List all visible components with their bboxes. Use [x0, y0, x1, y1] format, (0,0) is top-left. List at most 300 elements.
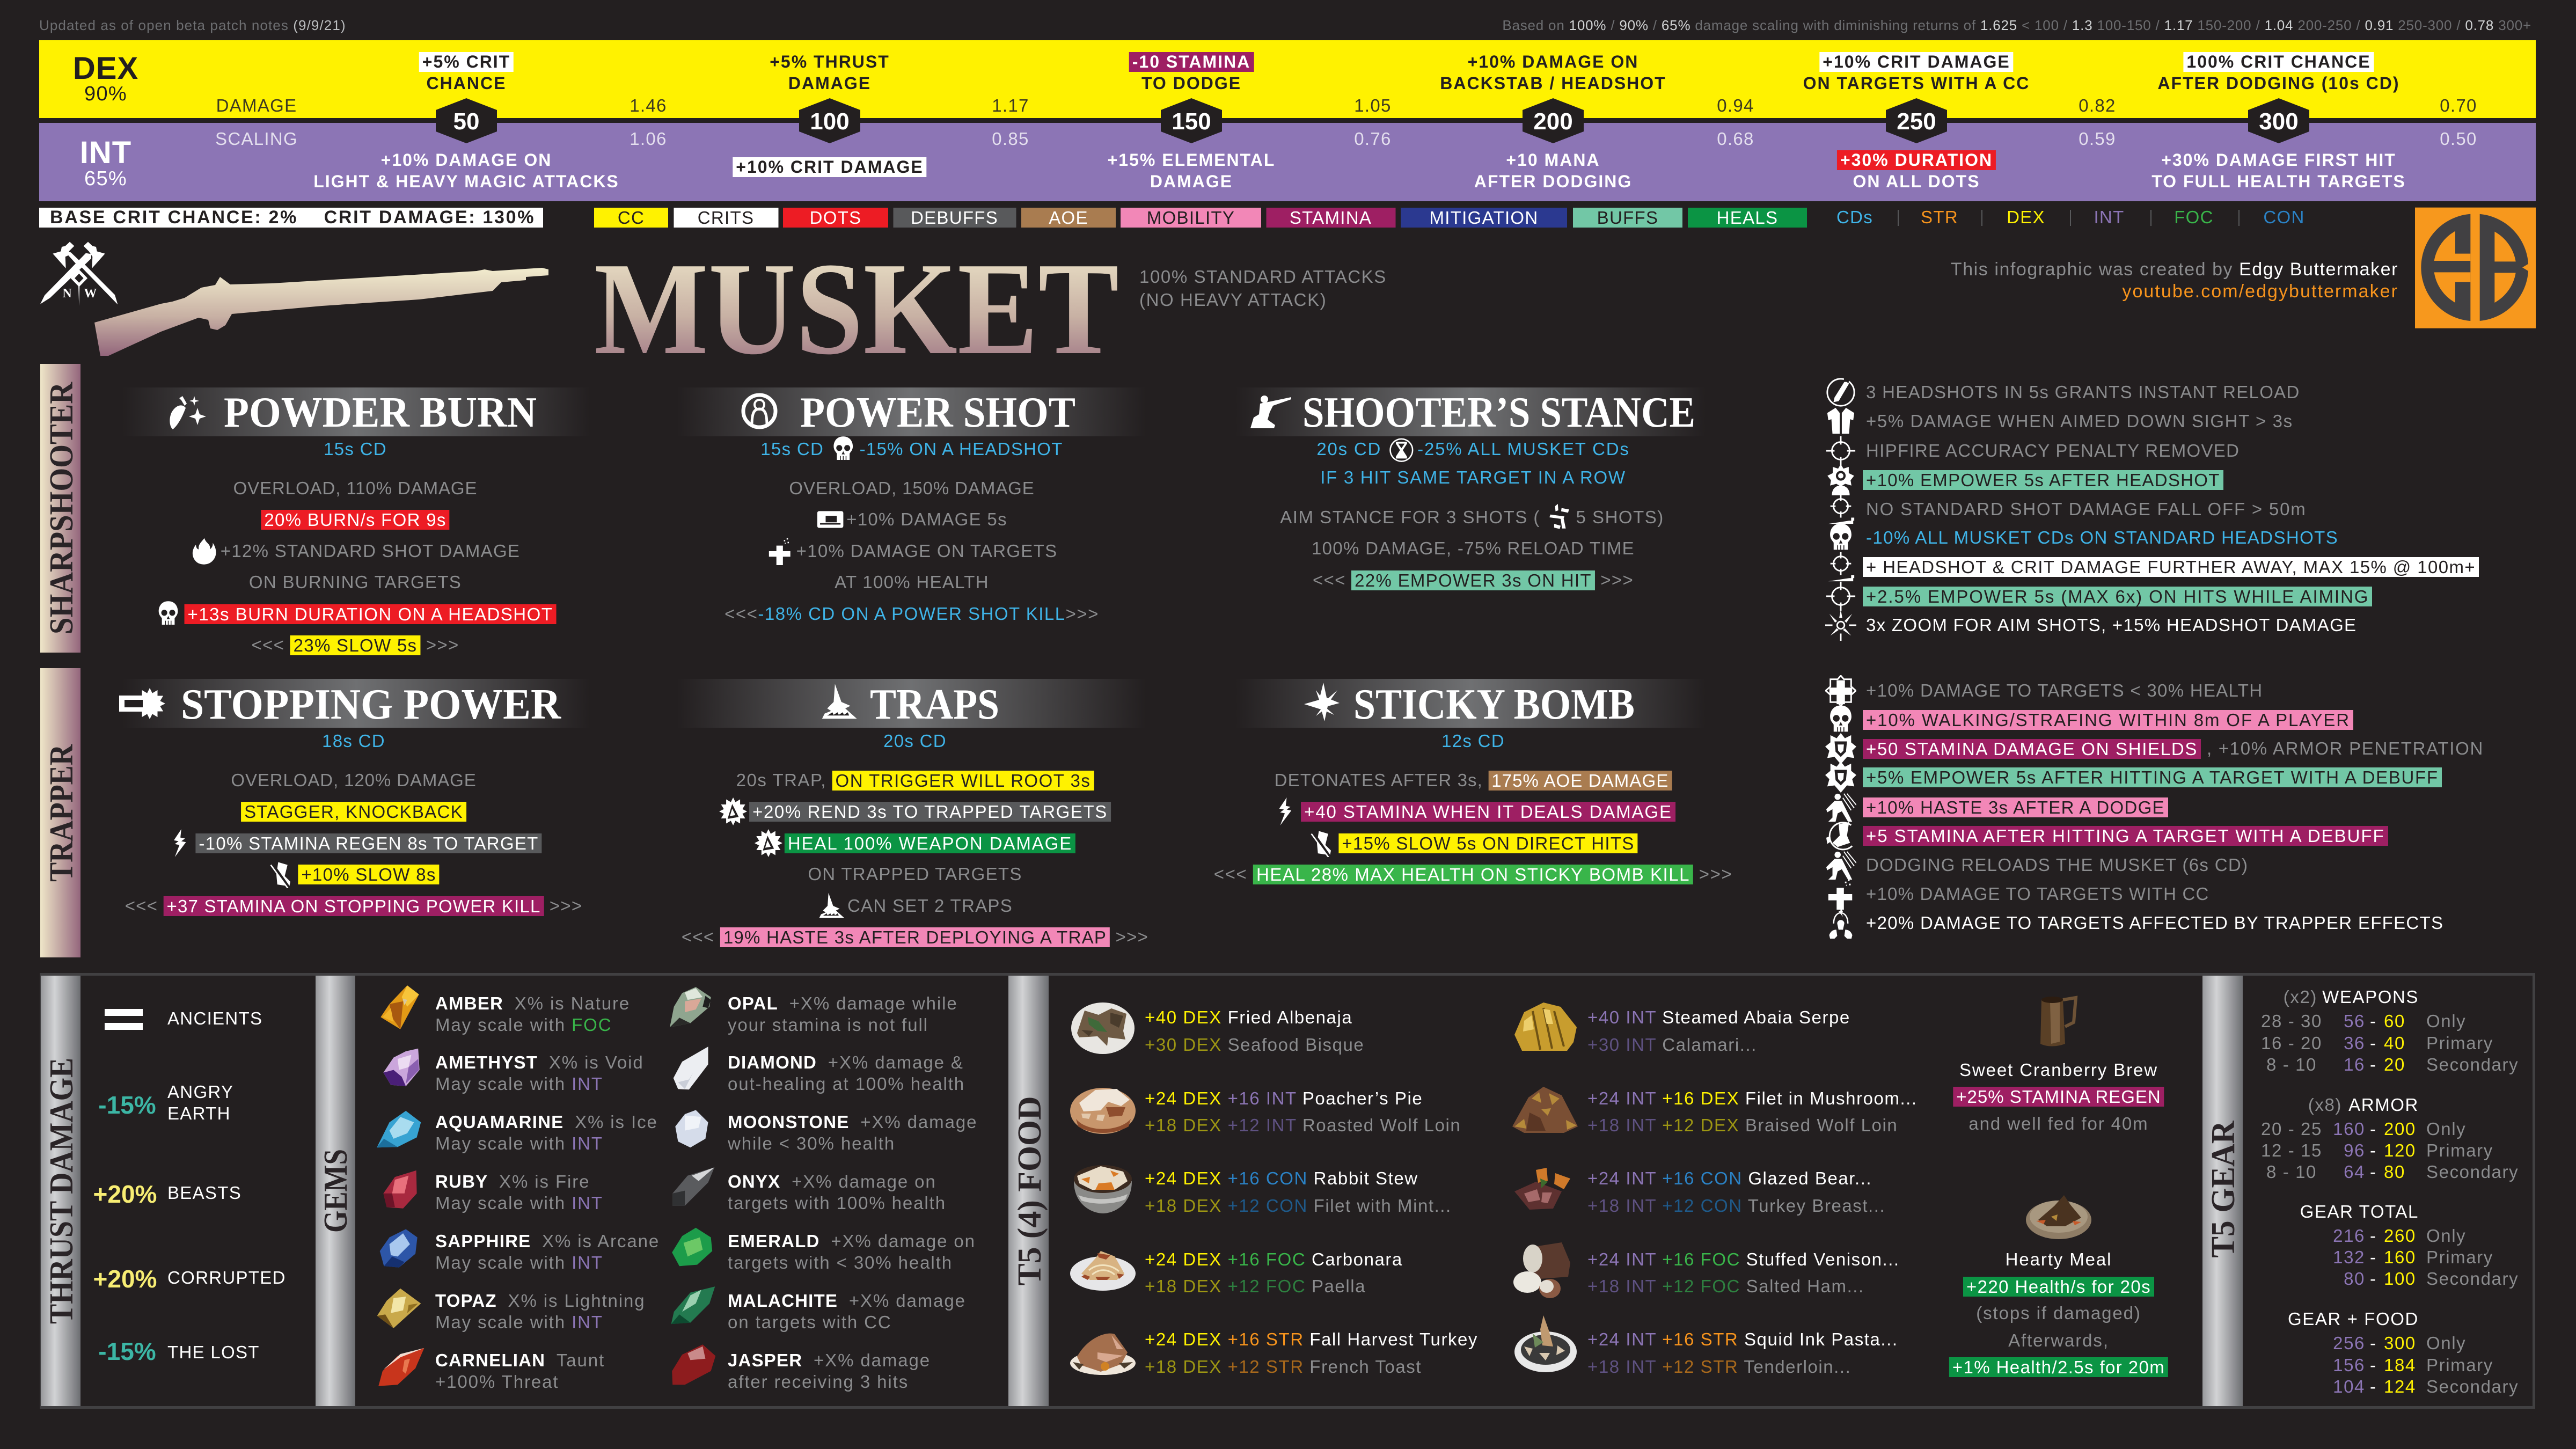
bonus: DEX 150: TO DODGE [1141, 74, 1241, 93]
heading bar [1235, 679, 1706, 728]
heading: sticky bomb [1235, 678, 1706, 729]
panel: trapper passives [1814, 676, 2501, 934]
level markers [436, 98, 2309, 143]
food: rabbit stew: +18 DEX +12 CON Filet with Mint... [1145, 1196, 1452, 1216]
bonus: INT 100: +10% CRIT DAMAGE [736, 157, 924, 176]
bonus: DEX 200: BACKSTAB / HEADSHOT [1440, 74, 1666, 93]
panel: food [1008, 973, 2202, 1409]
cooldown: 12s CD [1441, 731, 1505, 751]
passive 5: NO STANDARD SHOT DAMAGE FALL OFF > 50m [1866, 499, 2307, 519]
legend: CC: CC [618, 208, 645, 228]
gear: weapons [2202, 986, 2535, 1078]
food: stuffed venison: +24 INT +16 FOC Stuffed Venison... [1587, 1249, 1900, 1269]
gem: ruby: RUBY X% is Fire [435, 1172, 590, 1191]
gear: weapons: - [2370, 1055, 2377, 1074]
upgrade: heal: <<< >>> [1214, 864, 1732, 884]
passive 4: +10% EMPOWER 5s AFTER HEADSHOT [1866, 470, 2220, 489]
gear: armor: 200 [2384, 1119, 2416, 1139]
panel: attribute bonuses and scaling [39, 40, 2536, 201]
gem: jasper [662, 1350, 952, 1393]
level markers: 100 [810, 108, 850, 135]
icon: musket silhouette [94, 268, 548, 356]
gem: carnelian: +100% Threat [435, 1372, 559, 1392]
legend: stat colours: CDs [1836, 207, 1873, 227]
food: poacher's pie [1062, 1088, 1502, 1137]
passive 3: , +10% ARMOR PENETRATION [2207, 738, 2484, 758]
damage multipliers: 1.46 [630, 96, 667, 115]
bonus: INT 150 [1108, 150, 1275, 191]
bonus: DEX 300: AFTER DODGING (10s CD) [2157, 74, 2400, 93]
food: carbonara [1062, 1249, 1502, 1298]
sidebar: gems: GEMS [318, 1149, 354, 1233]
cooldown: 18s CD [322, 731, 385, 751]
food: albenaja: +40 DEX Fried Albenaja [1145, 1007, 1352, 1027]
damage multipliers: 0.94 [1717, 96, 1754, 115]
food: sweet cranberry brew: and well fed for 40m [1968, 1114, 2149, 1133]
legend: mitigation: MITIGATION [1429, 208, 1539, 228]
food: albenaja [1062, 1007, 1502, 1056]
passive 7: + HEADSHOT & CRIT DAMAGE FURTHER AWAY, MAX 15% @ 100m+ [1866, 557, 2476, 576]
legend: stamina [1266, 208, 1395, 228]
food: hearty meal: +1% Health/2.5s for 20m [1952, 1357, 2165, 1377]
passive 3: +50 STAMINA DAMAGE ON SHIELDS [1866, 738, 2198, 759]
bonus: DEX 200: +10% DAMAGE ON [1468, 52, 1638, 71]
gear: weapons: Only [2426, 1011, 2466, 1031]
perk: slow: +10% SLOW 8s [301, 864, 436, 884]
upgrade: stamina: +37 STAMINA ON STOPPING POWER KILL [166, 896, 541, 916]
sidebar: trapper: TRAPPER [43, 744, 80, 882]
legend: stat colours [1836, 207, 2305, 227]
panel: bottom reference [40, 973, 2535, 1409]
int multipliers: 0.50 [2440, 129, 2477, 149]
food: rabbit stew: +24 DEX +16 CON Rabbit Stew [1145, 1168, 1418, 1188]
passive 8: +2.5% EMPOWER 5s (MAX 6x) ON HITS WHILE AIMING [1866, 586, 2369, 606]
gem: malachite [662, 1290, 952, 1333]
value: corrupted: +20% [93, 1265, 157, 1293]
gear: armor: 12 - 15 [2261, 1140, 2322, 1160]
bonus: DEX 200 [1440, 52, 1666, 93]
perk: headshot burn: +13s BURN DURATION ON A HEADSHOT [188, 604, 553, 624]
gem: topaz: May scale with INT [435, 1312, 603, 1332]
line: ON TRAPPED TARGETS [808, 864, 1022, 884]
bonus: DEX 50 [419, 52, 514, 93]
gear: armor: Primary [2426, 1140, 2493, 1160]
gem: onyx [662, 1171, 952, 1214]
food: sweet cranberry brew: Sweet Cranberry Brew [1959, 1060, 2158, 1080]
int multipliers [630, 129, 2477, 149]
int multipliers: 0.59 [2079, 129, 2116, 149]
title: MUSKET: MUSKET [594, 236, 1119, 382]
gear: weapons: WEAPONS [2322, 987, 2419, 1007]
gem: emerald: targets with < 30% health [728, 1253, 953, 1272]
food: carbonara: +18 DEX +12 FOC Paella [1145, 1276, 1366, 1296]
line: OVERLOAD, 150% DAMAGE [789, 478, 1035, 498]
bonus: DEX 50: CHANCE [427, 74, 506, 93]
panel: power shot [677, 386, 1146, 655]
food: fall harvest turkey: +24 DEX +16 STR Fall Harvest Turkey [1145, 1329, 1478, 1349]
food: rabbit stew [1062, 1168, 1502, 1217]
level markers: 150 [1172, 108, 1211, 135]
legend: debuffs: DEBUFFS [911, 208, 998, 228]
food: filet in mushroom [1505, 1088, 1923, 1137]
upgrade: kill cd: <<<-18% CD ON A POWER SHOT KILL>>> [724, 604, 1099, 624]
band: INT [39, 123, 2536, 201]
passive 6: -10% ALL MUSKET CDs ON STANDARD HEADSHOTS [1866, 528, 2338, 547]
note: damage scaling basis: Based on 100% / 90% / 65% damage scaling with diminishing returns of 1.625 < 100 / 1.3 100-150 / 1.17 150-200 / 1.04 200-250 / 0.91 250-300 / 0.78 300+ [1502, 17, 2531, 33]
legend: crits [674, 208, 778, 228]
legend: heals: HEALS [1717, 208, 1778, 228]
label: the lost: THE LOST [167, 1342, 260, 1362]
gear: weapons: Secondary [2426, 1055, 2519, 1074]
passive 7: DODGING RELOADS THE MUSKET (6s CD) [1866, 855, 2248, 875]
icon: New World emblem [40, 241, 118, 306]
gem: opal: your stamina is not full [728, 1015, 928, 1035]
gear: armor: - [2370, 1140, 2377, 1160]
gem: aquamarine [369, 1111, 659, 1154]
passive 3 [1863, 738, 2484, 759]
food: hearty meal: (stops if damaged) [1976, 1303, 2141, 1323]
food: steamed abaia: +40 INT Steamed Abaia Serpe [1587, 1007, 1850, 1027]
food: steamed abaia [1505, 1007, 1923, 1056]
damage multipliers: 0.70 [2440, 96, 2477, 115]
line: 100% DAMAGE, -75% RELOAD TIME [1312, 538, 1635, 558]
gear: weapons: 60 [2384, 1011, 2405, 1031]
gear: weapons: Primary [2426, 1033, 2493, 1053]
line: ON BURNING TARGETS [249, 572, 462, 592]
legend: dots [783, 208, 888, 228]
sidebar: gear [2202, 976, 2243, 1406]
level markers: 250 [1897, 108, 1936, 135]
gem: sapphire [369, 1231, 659, 1274]
heading: sticky bomb: STICKY BOMB [1353, 681, 1635, 728]
heading bar [1235, 387, 1706, 436]
legend: stat colours: DEX [2007, 207, 2045, 227]
legend: heals [1688, 208, 1807, 228]
upgrade: stamina: <<< >>> [125, 896, 582, 916]
cooldown: 20s CD [883, 731, 947, 751]
sidebar: sharpshooter: SHARPSHOOTER [43, 382, 80, 634]
gem: moonstone: MOONSTONE +X% damage [728, 1112, 977, 1132]
food: sweet cranberry brew: +25% STAMINA REGEN [1956, 1086, 2161, 1107]
gem: carnelian [369, 1350, 659, 1393]
bonus: INT 300 [2151, 150, 2406, 191]
passive 4: +5% EMPOWER 5s AFTER HITTING A TARGET WITH A DEBUFF [1866, 767, 2439, 787]
gear: armor: - [2370, 1119, 2377, 1139]
gear: total: 160 [2384, 1247, 2416, 1267]
food: filet in mushroom: +24 INT +16 DEX Filet in Mushroom... [1587, 1088, 1918, 1108]
passive 3: HIPFIRE ACCURACY PENALTY REMOVED [1866, 441, 2240, 460]
food: poacher's pie: +18 DEX +12 INT Roasted Wolf Loin [1145, 1115, 1461, 1135]
gem: jasper: JASPER +X% damage [728, 1350, 931, 1370]
heading: power shot [677, 386, 1146, 437]
food: glazed bear: +18 INT +12 CON Turkey Breast... [1587, 1196, 1885, 1216]
label: INT: INT [80, 135, 131, 170]
label: scaling row: SCALING [215, 129, 298, 149]
upgrade: empower: 22% EMPOWER 3s ON HIT [1355, 570, 1592, 590]
gem: ruby [369, 1171, 659, 1214]
legend: stat colours: STR [1921, 207, 1958, 227]
gear: total: Secondary [2426, 1269, 2519, 1289]
label: angry earth: ANGRY [167, 1082, 233, 1102]
gem: sapphire: SAPPHIRE X% is Arcane [435, 1231, 660, 1251]
gear: gear plus food: 124 [2384, 1377, 2416, 1396]
gem: onyx: targets with 100% health [728, 1193, 946, 1213]
gear: total: GEAR TOTAL [2300, 1202, 2419, 1221]
aoe [1275, 770, 1672, 791]
panel: sticky bomb [1235, 678, 1706, 952]
legend: buffs [1573, 208, 1682, 228]
bonus: INT 150: +15% ELEMENTAL [1108, 150, 1275, 170]
gear: armor: ARMOR [2348, 1095, 2419, 1115]
passive 9: +20% DAMAGE TO TARGETS AFFECTED BY TRAPPER EFFECTS [1866, 913, 2443, 933]
gear: gear plus food: Primary [2426, 1355, 2493, 1375]
gem: opal [662, 993, 952, 1036]
damage multipliers [630, 96, 2477, 115]
gem: aquamarine: May scale with INT [435, 1133, 603, 1153]
gem: diamond [662, 1052, 952, 1095]
bonus: DEX 250: +10% CRIT DAMAGE [1823, 52, 2010, 71]
gem: moonstone [662, 1111, 952, 1154]
gear: weapons: (x2) [2284, 987, 2317, 1007]
gear: total: - [2370, 1247, 2377, 1267]
gear: gear plus food: 184 [2384, 1355, 2416, 1375]
value: the lost: -15% [98, 1337, 156, 1365]
gem: opal: OPAL +X% damage while [728, 993, 958, 1013]
panel: stopping power [122, 678, 590, 952]
bonus: DEX 150 [1129, 52, 1254, 93]
bonus: INT 50: LIGHT & HEAVY MAGIC ATTACKS [313, 172, 619, 191]
icon: New World emblem: W [84, 287, 97, 301]
gem: carnelian: CARNELIAN Taunt [435, 1350, 605, 1370]
panel: powder burn [122, 386, 590, 655]
food: squid ink pasta [1505, 1329, 1923, 1378]
legend: mitigation [1401, 208, 1567, 228]
food: filet in mushroom: +18 INT +12 DEX Braised Wolf Loin [1587, 1115, 1898, 1135]
root: ON TRIGGER WILL ROOT 3s [836, 771, 1091, 790]
gear: gear plus food [2202, 1308, 2535, 1400]
gem: malachite: MALACHITE +X% damage [728, 1291, 966, 1311]
sidebar: gear: T5 GEAR [2205, 1120, 2242, 1258]
note: standard attacks: (NO HEAVY ATTACK) [1139, 290, 1327, 310]
panel: gems [316, 973, 1008, 1409]
legend: CC [594, 208, 668, 228]
upgrade: slow: <<< >>> [251, 635, 459, 655]
perk: stamina regen: -10% STAMINA REGEN 8s TO TARGET [199, 833, 539, 853]
heading: powder burn [122, 386, 590, 437]
passive 2: +10% WALKING/STRAFING WITHIN 8m OF A PLAYER [1866, 709, 2350, 730]
gear: armor [2202, 1094, 2535, 1185]
food: albenaja: +30 DEX Seafood Bisque [1145, 1035, 1364, 1055]
gear: gear plus food: 156 [2333, 1355, 2365, 1375]
gem: sapphire: May scale with INT [435, 1253, 603, 1272]
gem: amethyst [369, 1052, 659, 1095]
gear: gear plus food: 104 [2333, 1377, 2365, 1396]
perk: stamina: +40 STAMINA WHEN IT DEALS DAMAGE [1304, 802, 1672, 821]
upgrade: haste: 19% HASTE 3s AFTER DEPLOYING A TRAP [723, 927, 1107, 947]
gear: weapons: 20 [2384, 1055, 2405, 1074]
cooldown: 15s CD -15% ON A HEADSHOT [760, 439, 1063, 459]
upgrade: heal: HEAL 28% MAX HEALTH ON STICKY BOMB KILL [1256, 864, 1690, 884]
line: AT 100% HEALTH [835, 572, 989, 592]
perk: slow: +15% SLOW 5s ON DIRECT HITS [1342, 833, 1635, 853]
cooldown: 15s CD [324, 439, 387, 459]
label: beasts: BEASTS [167, 1183, 241, 1203]
note: standard attacks [1139, 267, 1387, 310]
bonus: DEX 100: DAMAGE [788, 74, 871, 93]
label: damage row: DAMAGE [216, 96, 297, 115]
heading bar [677, 679, 1146, 728]
food: stuffed venison: +18 INT +12 FOC Salted Ham... [1587, 1276, 1864, 1296]
gear: gear plus food: - [2370, 1355, 2377, 1375]
gem: malachite: on targets with CC [728, 1312, 892, 1332]
bonus: DEX 100: +5% THRUST [770, 52, 890, 71]
value: angry earth: -15% [98, 1091, 156, 1119]
bonus: INT 250: +30% DURATION [1840, 150, 1993, 170]
damage multipliers: 0.82 [2079, 96, 2116, 115]
food: hearty meal: Afterwards, [2008, 1330, 2109, 1350]
legend: stat colours: INT [2094, 207, 2125, 227]
gear: total: 216 [2333, 1226, 2365, 1246]
line: OVERLOAD, 120% DAMAGE [231, 770, 477, 790]
gear: total: Only [2426, 1226, 2466, 1246]
gem: diamond: DIAMOND +X% damage & [728, 1052, 964, 1072]
heading: shooter's stance: SHOOTER’S STANCE [1302, 389, 1695, 436]
gear: armor: Only [2426, 1119, 2466, 1139]
label: angry earth [167, 1081, 275, 1124]
gem: emerald [662, 1231, 952, 1274]
food: squid ink pasta: +18 INT +12 STR Tenderloin... [1587, 1357, 1851, 1377]
cooldown condition: IF 3 HIT SAME TARGET IN A ROW [1320, 467, 1626, 487]
stagger: STAGGER, KNOCKBACK [244, 802, 463, 821]
bonus: DEX 300 [2157, 52, 2400, 93]
food: hearty meal [1924, 1191, 2193, 1379]
perk: 2 traps: CAN SET 2 TRAPS [847, 896, 1013, 916]
passive 8: +10% DAMAGE TO TARGETS WITH CC [1866, 884, 2209, 904]
bonus: DEX 250: ON TARGETS WITH A CC [1803, 74, 2030, 93]
heading bar [677, 387, 1146, 436]
heading bar [122, 679, 590, 728]
panel: thrust damage [40, 973, 316, 1409]
gear: armor: Secondary [2426, 1162, 2519, 1182]
credit: youtube.com/edgybuttermaker [2122, 281, 2398, 302]
value: beasts: +20% [93, 1180, 157, 1208]
legend: mobility: MOBILITY [1147, 208, 1235, 228]
gem: topaz [369, 1290, 659, 1333]
gem: amber: AMBER X% is Nature [435, 993, 630, 1013]
sidebar: gems [316, 976, 355, 1406]
food: fall harvest turkey: +18 DEX +12 STR French Toast [1145, 1357, 1422, 1377]
passive 5: +10% HASTE 3s AFTER A DODGE [1866, 797, 2165, 817]
heading: stopping power: STOPPING POWER [181, 681, 561, 728]
sidebar: trapper [40, 668, 80, 957]
gem: amethyst: AMETHYST X% is Void [435, 1052, 644, 1072]
cooldown: 20s CD -25% ALL MUSKET CDs [1316, 439, 1630, 459]
damage multipliers: 1.17 [992, 96, 1029, 115]
gem: jasper: after receiving 3 hits [728, 1372, 909, 1392]
int multipliers: 0.68 [1717, 129, 1754, 149]
food: squid ink pasta: +24 INT +16 STR Squid Ink Pasta... [1587, 1329, 1898, 1349]
food: fall harvest turkey [1062, 1329, 1502, 1378]
food: hearty meal: +220 Health/s for 20s [1966, 1276, 2151, 1297]
gear: gear plus food: - [2370, 1333, 2377, 1353]
bonus: INT 50: +10% DAMAGE ON [381, 150, 552, 170]
passive 1: 3 HEADSHOTS IN 5s GRANTS INSTANT RELOAD [1866, 382, 2300, 402]
gear: weapons: 8 - 10 [2266, 1055, 2317, 1074]
heading: traps [677, 678, 1146, 729]
sidebar: food: T5 (4) FOOD [1012, 1096, 1048, 1286]
bonus: DEX 300: 100% CRIT CHANCE [2186, 52, 2371, 71]
sidebar: food [1008, 976, 1049, 1406]
bonus: INT 200: AFTER DODGING [1474, 172, 1632, 191]
gear: total [2202, 1201, 2535, 1292]
gem: diamond: out-healing at 100% health [728, 1074, 965, 1094]
icon: New World emblem: N [62, 287, 72, 301]
passive 2: +5% DAMAGE WHEN AIMED DOWN SIGHT > 3s [1866, 411, 2293, 431]
aoe: DETONATES AFTER 3s, [1275, 770, 1483, 790]
label: corrupted: CORRUPTED [167, 1268, 286, 1287]
gear: gear plus food: Only [2426, 1333, 2466, 1353]
perk: full health: +10% DAMAGE ON TARGETS [796, 541, 1057, 561]
gear: gear plus food: 256 [2333, 1333, 2365, 1353]
gear: armor: 20 - 25 [2261, 1119, 2322, 1139]
gear: weapons: 36 [2344, 1033, 2365, 1053]
int multipliers: 1.06 [630, 129, 667, 149]
burn: 20% BURN/s FOR 9s [264, 510, 447, 529]
passive 6: +5 STAMINA AFTER HITTING A TARGET WITH A DEBUFF [1866, 825, 2385, 846]
gear: weapons: 56 [2344, 1011, 2365, 1031]
panel: traps [677, 678, 1146, 952]
food: poacher's pie: +24 DEX +16 INT Poacher’s Pie [1145, 1088, 1423, 1108]
level markers: 50 [453, 108, 479, 135]
bonus: DEX 100 [770, 52, 890, 93]
gear: weapons: - [2370, 1033, 2377, 1053]
bonus: INT 250: ON ALL DOTS [1853, 172, 1980, 191]
gem: amethyst: May scale with INT [435, 1074, 603, 1094]
gear: total: - [2370, 1269, 2377, 1289]
panel: gear [2202, 973, 2535, 1409]
passive 1: +10% DAMAGE TO TARGETS < 30% HEALTH [1866, 680, 2263, 700]
band: DEX [39, 40, 2536, 118]
legend: crits: CRITS [698, 208, 754, 228]
gear: armor: 96 [2344, 1140, 2365, 1160]
food: glazed bear [1505, 1168, 1923, 1217]
panel: shooter's stance [1235, 386, 1706, 655]
gem: topaz: TOPAZ X% is Lightning [435, 1291, 646, 1311]
perk: shots: AIM STANCE FOR 3 SHOTS ( 5 SHOTS) [1280, 507, 1664, 527]
gear: gear plus food: Secondary [2426, 1377, 2519, 1396]
heading bar [122, 387, 590, 436]
upgrade: empower: <<< >>> [1313, 570, 1634, 590]
legend: stamina: STAMINA [1290, 208, 1372, 228]
legend: stat colours: CON [2263, 207, 2305, 227]
aoe: 175% AOE DAMAGE [1491, 771, 1668, 790]
gear: weapons: 28 - 30 [2261, 1011, 2322, 1031]
label: DEX 90%: DEX [73, 51, 138, 86]
legend [39, 207, 2305, 228]
gear: weapons: 16 [2344, 1055, 2365, 1074]
perk: ammo: +10% DAMAGE 5s [846, 509, 1007, 529]
value: 65%: 65% [84, 167, 127, 190]
sidebar: thrust damage: THRUST DAMAGE [43, 1058, 80, 1324]
gear: armor: 120 [2384, 1140, 2416, 1160]
bonus: DEX 250 [1803, 52, 2030, 93]
food: steamed abaia: +30 INT Calamari... [1587, 1035, 1757, 1055]
root [736, 770, 1094, 791]
gear: weapons: 40 [2384, 1033, 2405, 1053]
gear: gear plus food: 300 [2384, 1333, 2416, 1353]
food: hearty meal: Hearty Meal [2006, 1249, 2112, 1269]
bonus: INT 200 [1474, 150, 1632, 191]
